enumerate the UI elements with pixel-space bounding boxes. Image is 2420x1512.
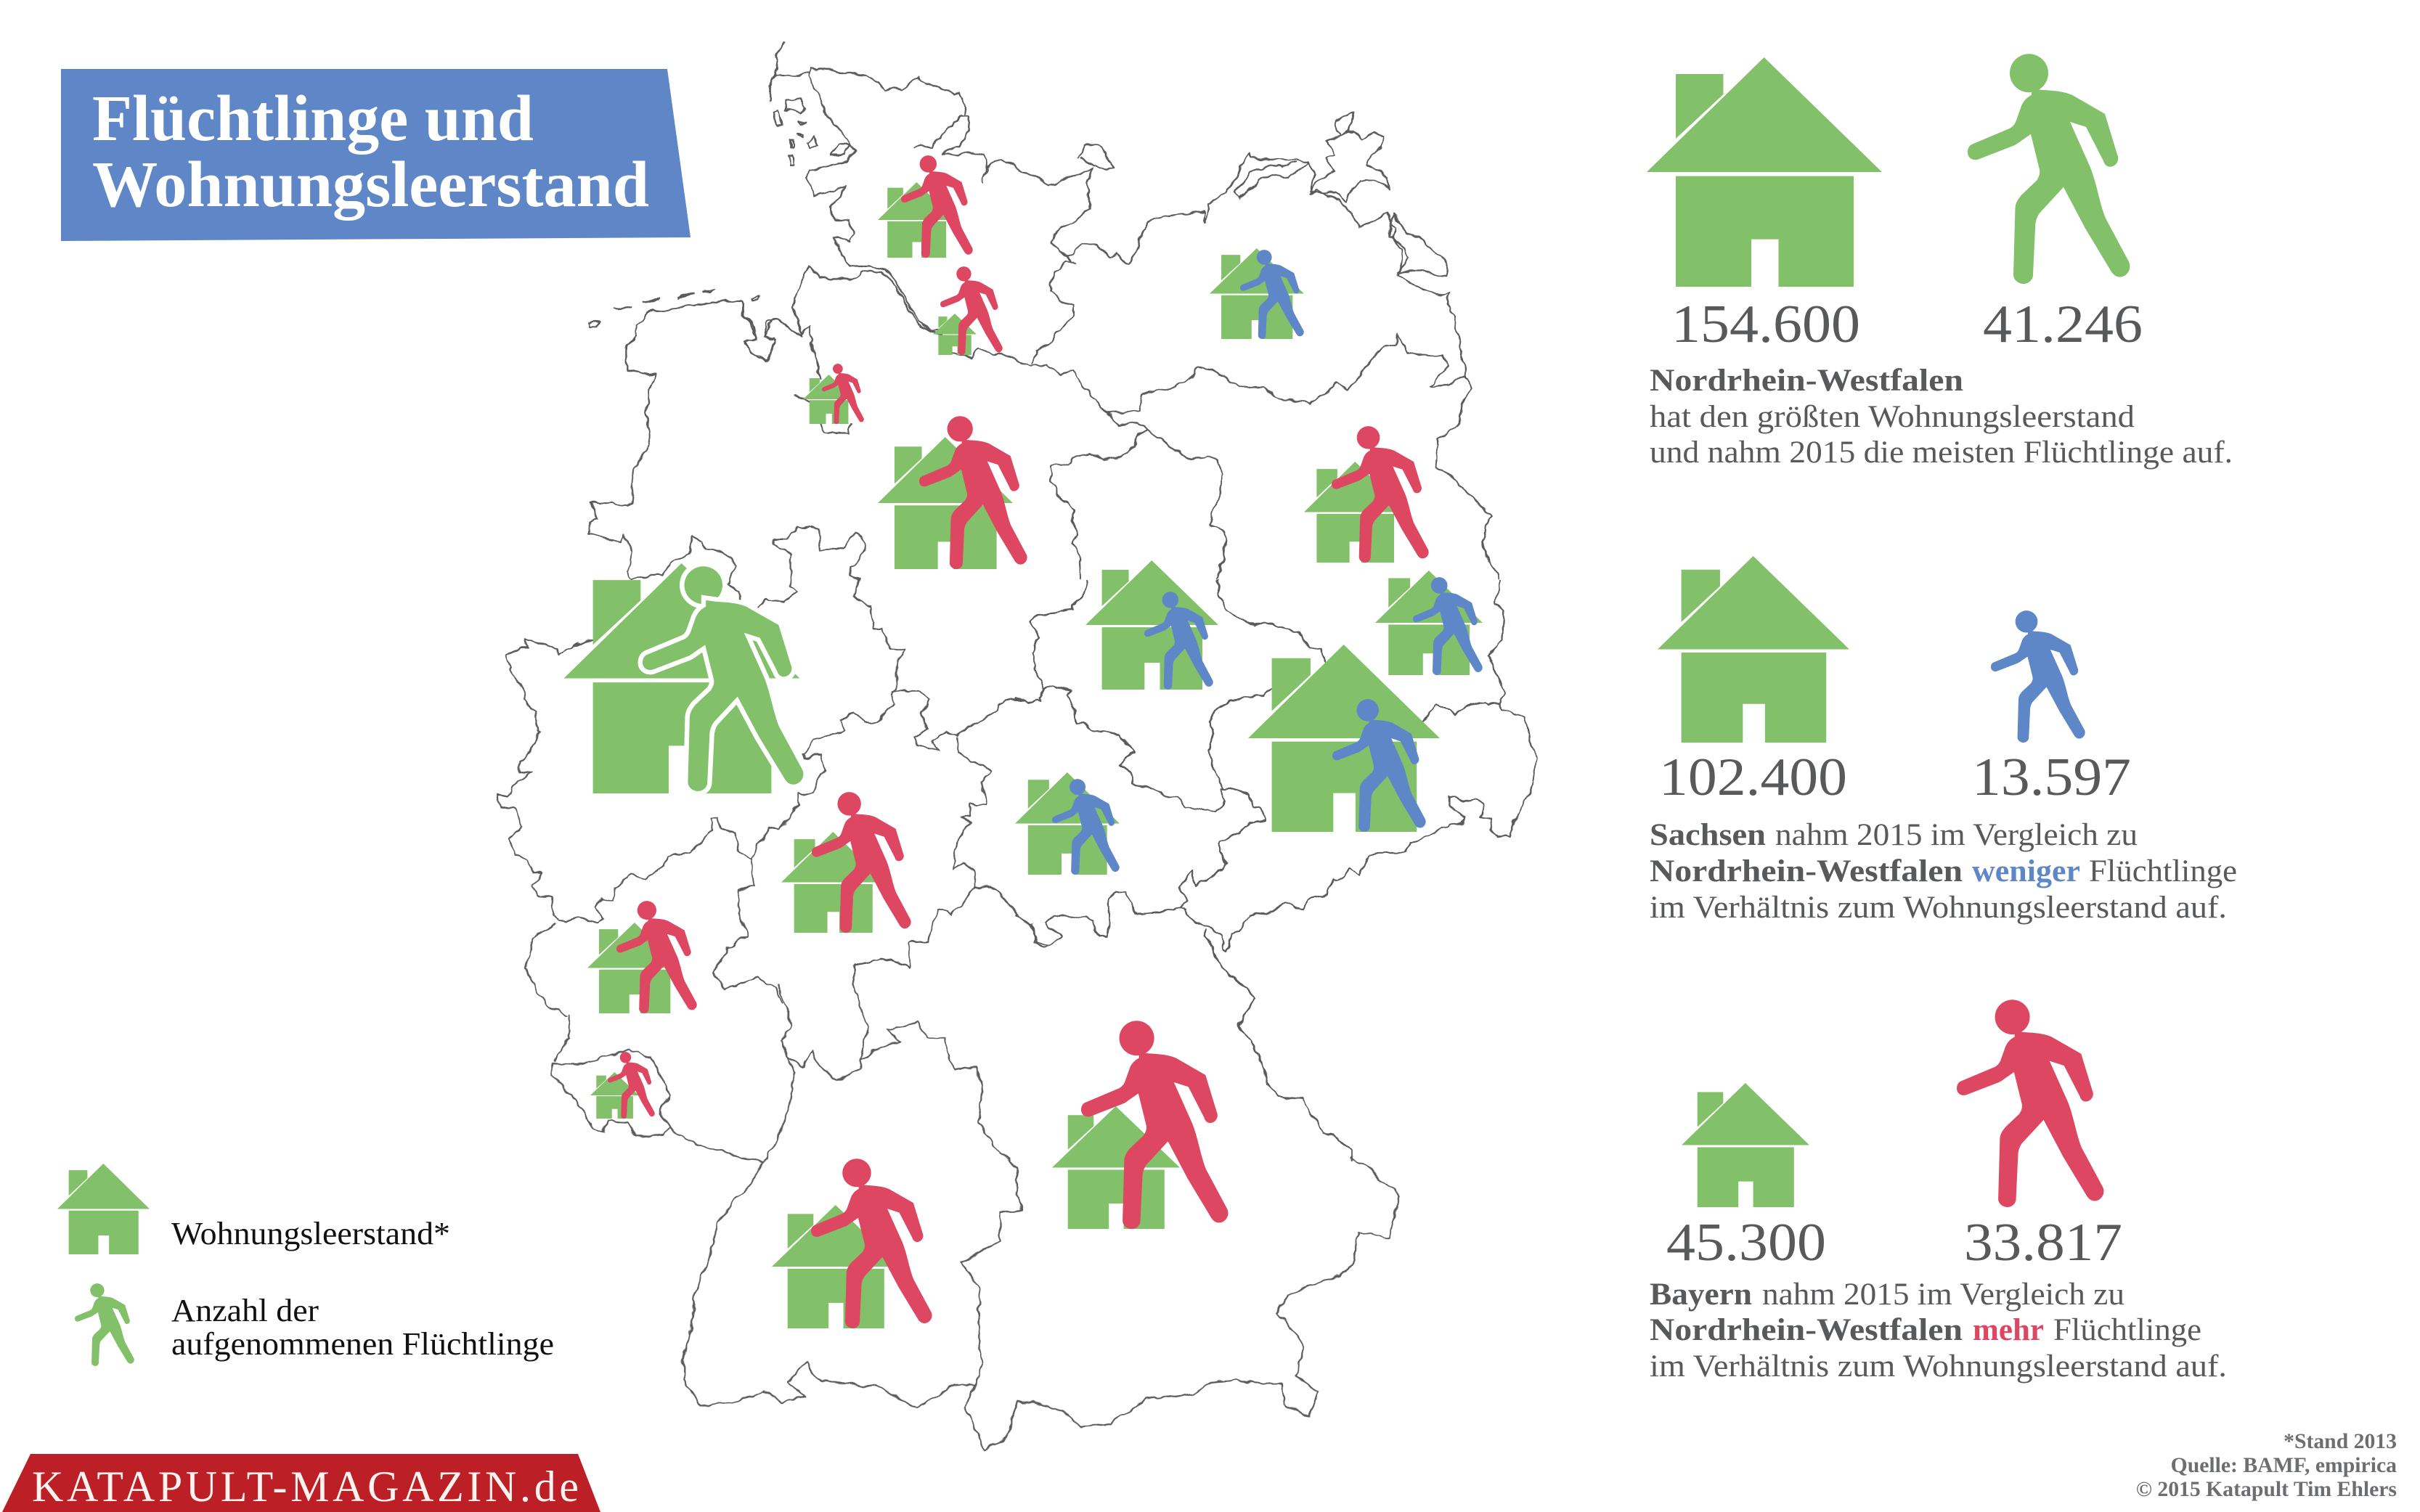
house: [1210, 248, 1304, 339]
text block: [1650, 364, 2233, 470]
person: [812, 792, 911, 933]
text block: Nordrhein-Westfalen: [1650, 364, 1963, 398]
text block: [1650, 1278, 2227, 1384]
marker: Sachsen-Anhalt: [1085, 560, 1218, 690]
house: [1248, 645, 1440, 832]
person: [608, 1052, 655, 1119]
person: [1144, 592, 1213, 690]
marker: Rheinland-Pfalz: [587, 901, 697, 1013]
text block: Flüchtlinge: [2053, 1313, 2201, 1347]
text block: Nordrhein-Westfalen: [1650, 1313, 1963, 1347]
person: [1081, 1021, 1229, 1229]
text block: nahm 2015 im Vergleich zu: [1775, 818, 2138, 852]
person: [940, 266, 1003, 355]
map of Germany with state borders: [496, 41, 1537, 1450]
person: [1240, 250, 1304, 339]
house: [563, 563, 800, 793]
number: vacant flats: 102.400: [1659, 748, 1847, 807]
marker: Schleswig-Holstein: [878, 155, 973, 258]
title banner: Wohnungsleerstand: [92, 149, 649, 221]
person: [1332, 426, 1429, 563]
footer: brand banner: KATAPULT-MAGAZIN.de: [32, 1463, 579, 1511]
house: [1052, 1106, 1180, 1229]
house: [878, 437, 1013, 569]
text block: und nahm 2015 die meisten Flüchtlinge auf.: [1650, 436, 2233, 470]
house: [772, 1205, 887, 1328]
house icon: [1682, 1083, 1809, 1207]
marker: Saarland: [590, 1052, 655, 1119]
marker: Mecklenburg-Vorpommern: [1210, 248, 1304, 339]
house: [590, 1072, 638, 1119]
person with white outline: [637, 566, 803, 793]
marker: Hamburg: [933, 266, 1003, 355]
legend: [57, 1164, 554, 1366]
person: [811, 1158, 932, 1328]
text block: im Verhältnis zum Wohnungsleerstand auf.: [1650, 1349, 2227, 1384]
marker: Bremen: [803, 364, 864, 424]
credits: Quelle: BAMF, empirica: [2171, 1454, 2397, 1477]
number: vacant flats: 154.600: [1671, 295, 1860, 354]
marker: Baden-Württemberg: [772, 1158, 932, 1328]
person: [1413, 577, 1483, 675]
legend label: refugees: aufgenommenen Flüchtlinge: [171, 1326, 554, 1362]
text block: nahm 2015 im Vergleich zu: [1762, 1278, 2124, 1312]
marker: Bayern: [1052, 1021, 1228, 1229]
legend person icon: [75, 1283, 134, 1366]
text block: Nordrhein-Westfalen: [1650, 854, 1963, 888]
text block: Bayern: [1650, 1278, 1752, 1312]
number: refugees: 33.817: [1964, 1213, 2122, 1272]
house: [781, 832, 875, 933]
text block: im Verhältnis zum Wohnungsleerstand auf.: [1650, 891, 2227, 925]
house icon: [1647, 57, 1882, 287]
house: [1015, 772, 1120, 875]
number: refugees: 41.246: [1983, 295, 2143, 354]
marker: Niedersachsen: [878, 416, 1027, 569]
credits: © 2015 Katapult Tim Ehlers: [2136, 1478, 2397, 1501]
person icon: [1968, 54, 2130, 284]
person: [822, 364, 864, 424]
marker: Berlin: [1375, 571, 1483, 675]
house icon: [1658, 556, 1849, 743]
legend label: refugees: Anzahl der: [171, 1293, 319, 1328]
house: [1375, 571, 1483, 675]
person: [1052, 779, 1120, 875]
person: [901, 155, 973, 258]
panel: Nordrhein-Westfalen: [1647, 54, 2233, 470]
house: [933, 314, 977, 355]
house: [1304, 462, 1394, 563]
legend house icon: [57, 1164, 150, 1254]
text block: mehr: [1973, 1313, 2044, 1347]
house: [803, 375, 848, 424]
panel: Bayern: [1650, 1000, 2227, 1384]
marker: Hessen: [781, 792, 911, 933]
marker: Brandenburg: [1304, 426, 1429, 563]
title banner: [61, 69, 690, 241]
person: [919, 416, 1027, 569]
text block: Flüchtlinge: [2089, 854, 2237, 888]
text block: hat den größten Wohnungsleerstand: [1650, 400, 2135, 434]
marker: Nordrhein-Westfalen: [563, 563, 803, 793]
marker: Sachsen: [1248, 645, 1440, 832]
text block: [1650, 818, 2237, 925]
credits: *Stand 2013: [2283, 1430, 2397, 1453]
text block: Sachsen: [1650, 818, 1766, 852]
house: [587, 923, 682, 1013]
person icon: [1957, 1000, 2103, 1207]
text block: weniger: [1972, 854, 2080, 888]
legend label: vacancy: Wohnungsleerstand*: [171, 1216, 450, 1251]
number: refugees: 13.597: [1972, 748, 2131, 807]
panel: Sachsen: [1650, 556, 2237, 925]
number: vacant flats: 45.300: [1666, 1213, 1826, 1272]
person: [1332, 699, 1426, 832]
legend label: refugees: [171, 1293, 554, 1362]
title banner: Flüchtlinge und: [92, 83, 534, 155]
house: [1085, 560, 1218, 690]
house: [878, 182, 947, 258]
credits: [2136, 1430, 2397, 1501]
marker: Thüringen: [1015, 772, 1120, 875]
person: [616, 901, 697, 1013]
person icon: [1991, 610, 2085, 743]
